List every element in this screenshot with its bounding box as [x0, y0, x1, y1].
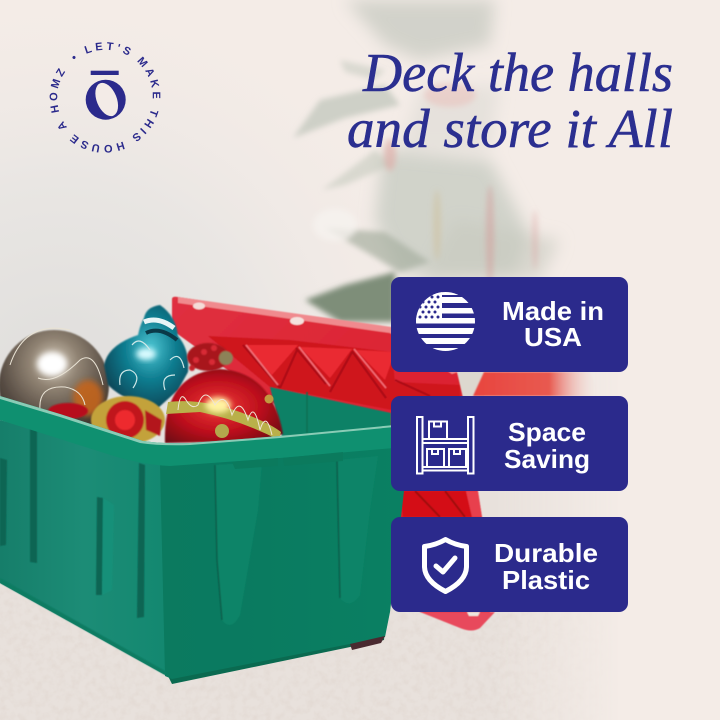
label: space saving: Space	[508, 417, 586, 447]
panel: durable plastic	[391, 517, 628, 612]
bin shadow on floor	[165, 630, 385, 684]
silver ornament	[0, 328, 109, 440]
logo bar	[91, 71, 119, 75]
large red ornament with gold band	[165, 369, 283, 443]
lid handle below panels	[420, 612, 495, 630]
small red and gold ornament	[48, 396, 165, 444]
title: Deck the halls	[362, 42, 673, 103]
label: made in USA: Made in	[502, 296, 604, 326]
icon: US flag	[416, 292, 476, 351]
icon: shelves with boxes	[417, 417, 474, 474]
left side slots	[0, 427, 167, 675]
rim tabs	[232, 452, 343, 469]
bin foot shadow	[350, 636, 385, 650]
icon: shield with check	[424, 540, 466, 592]
bin front	[160, 440, 405, 679]
red storage lid	[172, 297, 495, 630]
bin left side	[0, 420, 167, 676]
label: space saving: Saving	[504, 444, 590, 474]
bin interior wall	[270, 387, 391, 436]
label: space saving	[504, 417, 590, 474]
label: durable plastic: Plastic	[502, 565, 590, 595]
title: and store it All	[347, 98, 673, 159]
logo badge	[50, 42, 160, 153]
label: durable plastic: Durable	[494, 538, 598, 568]
ornaments	[0, 305, 283, 444]
panel: made in USA	[391, 277, 628, 372]
label: made in USA: USA	[524, 322, 582, 352]
circular slogan: • LET'S MAKE THIS HOUSE A HOMZ	[50, 42, 160, 153]
lid ribs	[208, 336, 482, 517]
front ribs	[215, 456, 378, 625]
carpet floor	[0, 372, 562, 720]
teal ornament	[104, 305, 188, 408]
label: made in USA	[502, 296, 604, 352]
bin rim	[0, 396, 405, 466]
title	[347, 42, 673, 159]
logo ring	[86, 80, 126, 120]
blurred red ribbon behind panels	[458, 372, 600, 396]
green storage bin	[0, 396, 405, 684]
red berries	[187, 343, 233, 371]
panel: space saving	[391, 396, 628, 491]
label: durable plastic	[494, 538, 598, 595]
blurred christmas tree	[293, 0, 560, 322]
